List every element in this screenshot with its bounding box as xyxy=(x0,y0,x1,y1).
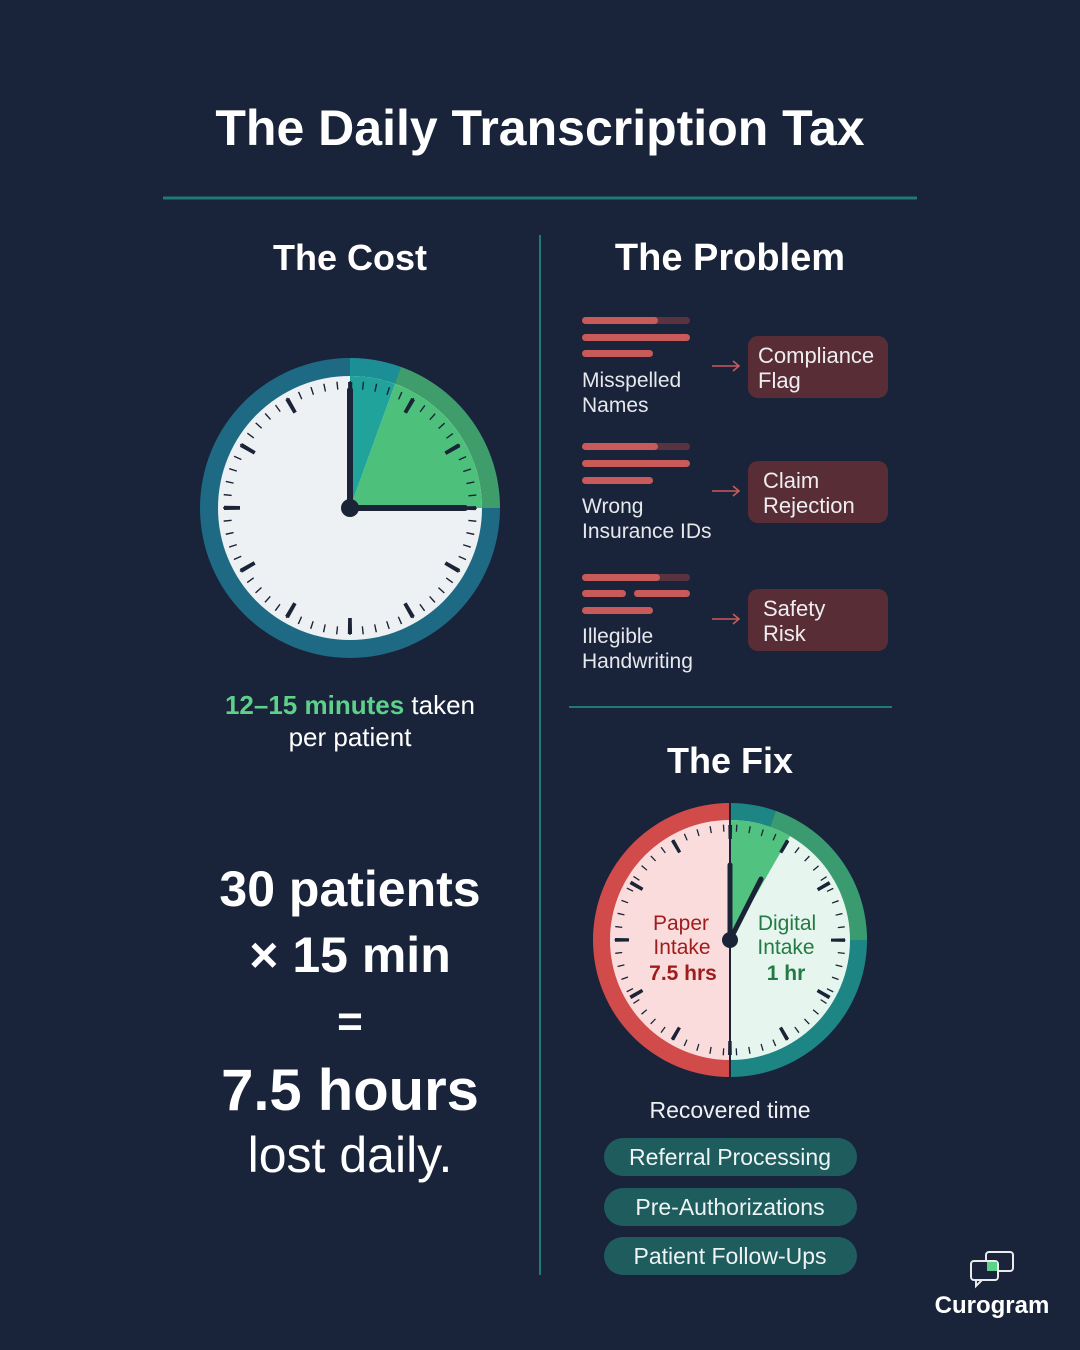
clock: paper vs digital: Paper xyxy=(653,912,709,935)
heading: the fix: The Fix xyxy=(667,740,793,781)
text: calculation: lost daily. xyxy=(248,1127,452,1183)
row: misspelled names: Flag xyxy=(758,368,801,393)
clock: cost xyxy=(200,358,500,658)
clock: paper vs digital: 1 hr xyxy=(767,962,805,985)
pill: pre-authorizations: Pre-Authorizations xyxy=(635,1194,825,1220)
clock: paper vs digital xyxy=(593,803,867,1077)
panel: the cost xyxy=(200,237,500,1183)
text: calculation: 7.5 hours xyxy=(221,1058,479,1123)
row: misspelled names: Misspelled xyxy=(582,369,681,392)
heading: the cost: The Cost xyxy=(273,237,427,278)
text: calculation: × 15 min xyxy=(249,927,451,983)
clock: paper vs digital: Digital xyxy=(758,912,816,935)
pill: referral processing: Referral Processing xyxy=(629,1144,831,1170)
text: recovered time: Recovered time xyxy=(649,1097,811,1123)
row: misspelled names xyxy=(582,317,888,417)
row: wrong insurance ids: Insurance IDs xyxy=(582,520,712,543)
row: wrong insurance ids xyxy=(582,443,888,543)
text: calculation xyxy=(219,861,481,1183)
row: wrong insurance ids: Wrong xyxy=(582,495,643,518)
row: illegible handwriting: Risk xyxy=(763,621,807,646)
row: illegible handwriting: Illegible xyxy=(582,625,653,648)
pill: referral processing xyxy=(604,1138,857,1176)
panel: the cost: per patient xyxy=(289,722,412,752)
row: wrong insurance ids: Claim xyxy=(763,468,819,493)
row: misspelled names: Names xyxy=(582,394,649,417)
text: minutes per patient: 12–15 minutes taken xyxy=(225,690,475,720)
clock: paper vs digital: Intake xyxy=(757,936,815,959)
clock: paper vs digital: 7.5 hrs xyxy=(649,962,717,985)
clock: paper vs digital: Intake xyxy=(653,936,711,959)
row: illegible handwriting: Safety xyxy=(763,596,825,621)
heading: the problem: The Problem xyxy=(615,237,845,279)
title: The Daily Transcription Tax xyxy=(215,100,865,156)
row: illegible handwriting: Handwriting xyxy=(582,650,693,673)
logo: curogram: Curogram xyxy=(935,1292,1049,1319)
pill: patient follow-ups xyxy=(604,1237,857,1275)
logo: curogram xyxy=(935,1252,1049,1319)
pill: patient follow-ups: Patient Follow-Ups xyxy=(633,1243,827,1269)
row: misspelled names: Compliance xyxy=(758,343,874,368)
text: calculation: = xyxy=(337,997,363,1046)
pill: pre-authorizations xyxy=(604,1188,857,1226)
text: calculation: 30 patients xyxy=(219,861,481,917)
panel: the problem xyxy=(582,237,888,673)
row: wrong insurance ids: Rejection xyxy=(763,493,855,518)
panel: the fix xyxy=(593,740,867,1275)
row: illegible handwriting xyxy=(582,574,888,673)
